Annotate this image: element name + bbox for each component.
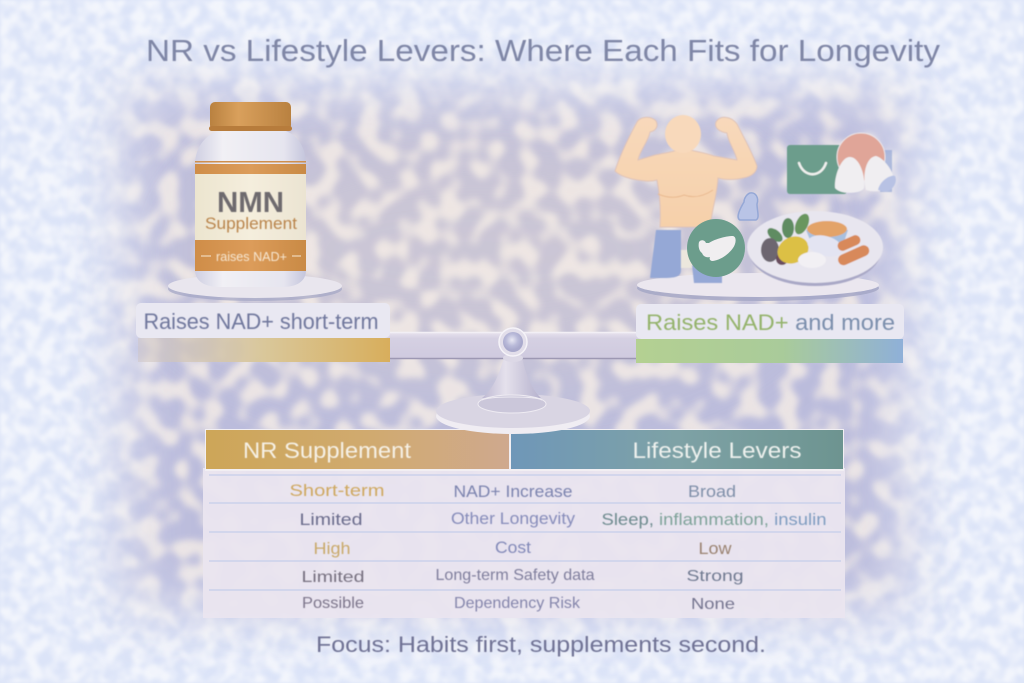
row: dependency risk: Possible xyxy=(302,595,364,612)
right pan xyxy=(637,273,879,301)
row: other longevity: Limited xyxy=(300,510,362,529)
row: dependency risk: None xyxy=(691,596,735,613)
header: NR Supplement: NR Supplement xyxy=(243,438,411,463)
icon: small water drop xyxy=(738,193,758,220)
title: NR vs Lifestyle Levers: Where Each Fits for Longevity xyxy=(146,33,941,68)
row: dependency risk xyxy=(302,595,735,613)
left label: raises NAD+ short-term xyxy=(136,303,390,362)
row: other longevity: Other Longevity xyxy=(451,509,576,528)
row: long-term safety data xyxy=(302,567,744,586)
bottle label xyxy=(195,161,306,271)
right label: raises NAD+ and more: Raises NAD+ and more xyxy=(646,310,895,335)
row: NAD+ increase: NAD+ Increase xyxy=(454,482,572,501)
bottle cap xyxy=(209,102,292,131)
row: long-term safety data: Strong xyxy=(686,568,744,585)
supplement bottle xyxy=(195,102,306,287)
row: NAD+ increase: Broad xyxy=(688,482,736,501)
icon: muscular figure xyxy=(615,115,757,283)
row: cost: Cost xyxy=(495,538,531,557)
row: cost: High xyxy=(314,539,350,558)
header: NR Supplement xyxy=(206,430,509,469)
table body xyxy=(203,468,845,618)
icon: green circle with arm xyxy=(687,219,745,277)
icon: green card with smile xyxy=(787,133,896,194)
row: other longevity xyxy=(300,509,826,529)
bottle label: raises NAD+ xyxy=(216,249,287,264)
footer focus line: Focus: Habits first, supplements second. xyxy=(316,632,766,657)
left pan xyxy=(168,274,342,301)
scale beam xyxy=(385,332,640,358)
row: long-term safety data: Limited xyxy=(302,569,364,586)
row: dependency risk: Dependency Risk xyxy=(454,595,581,612)
bottle label: Supplement xyxy=(205,214,297,233)
comparison table xyxy=(203,429,845,618)
row: NAD+ increase: Short-term xyxy=(290,481,384,500)
row: NAD+ increase xyxy=(290,481,736,501)
header: Lifestyle Levers xyxy=(511,430,843,469)
bottle label: NMN xyxy=(217,187,284,219)
table frame xyxy=(205,429,844,471)
icon: plate of food xyxy=(747,211,883,286)
row: cost: Low xyxy=(698,539,732,558)
scale base and pivot xyxy=(436,328,590,434)
header: Lifestyle Levers: Lifestyle Levers xyxy=(632,438,802,463)
bottle body xyxy=(195,128,306,287)
row: cost xyxy=(314,538,732,558)
row: other longevity: Sleep, inflammation, insulin xyxy=(602,510,826,529)
row: long-term safety data: Long-term Safety data xyxy=(436,567,595,584)
left label: raises NAD+ short-term: Raises NAD+ short-term xyxy=(144,309,378,334)
right label: raises NAD+ and more xyxy=(636,304,904,363)
